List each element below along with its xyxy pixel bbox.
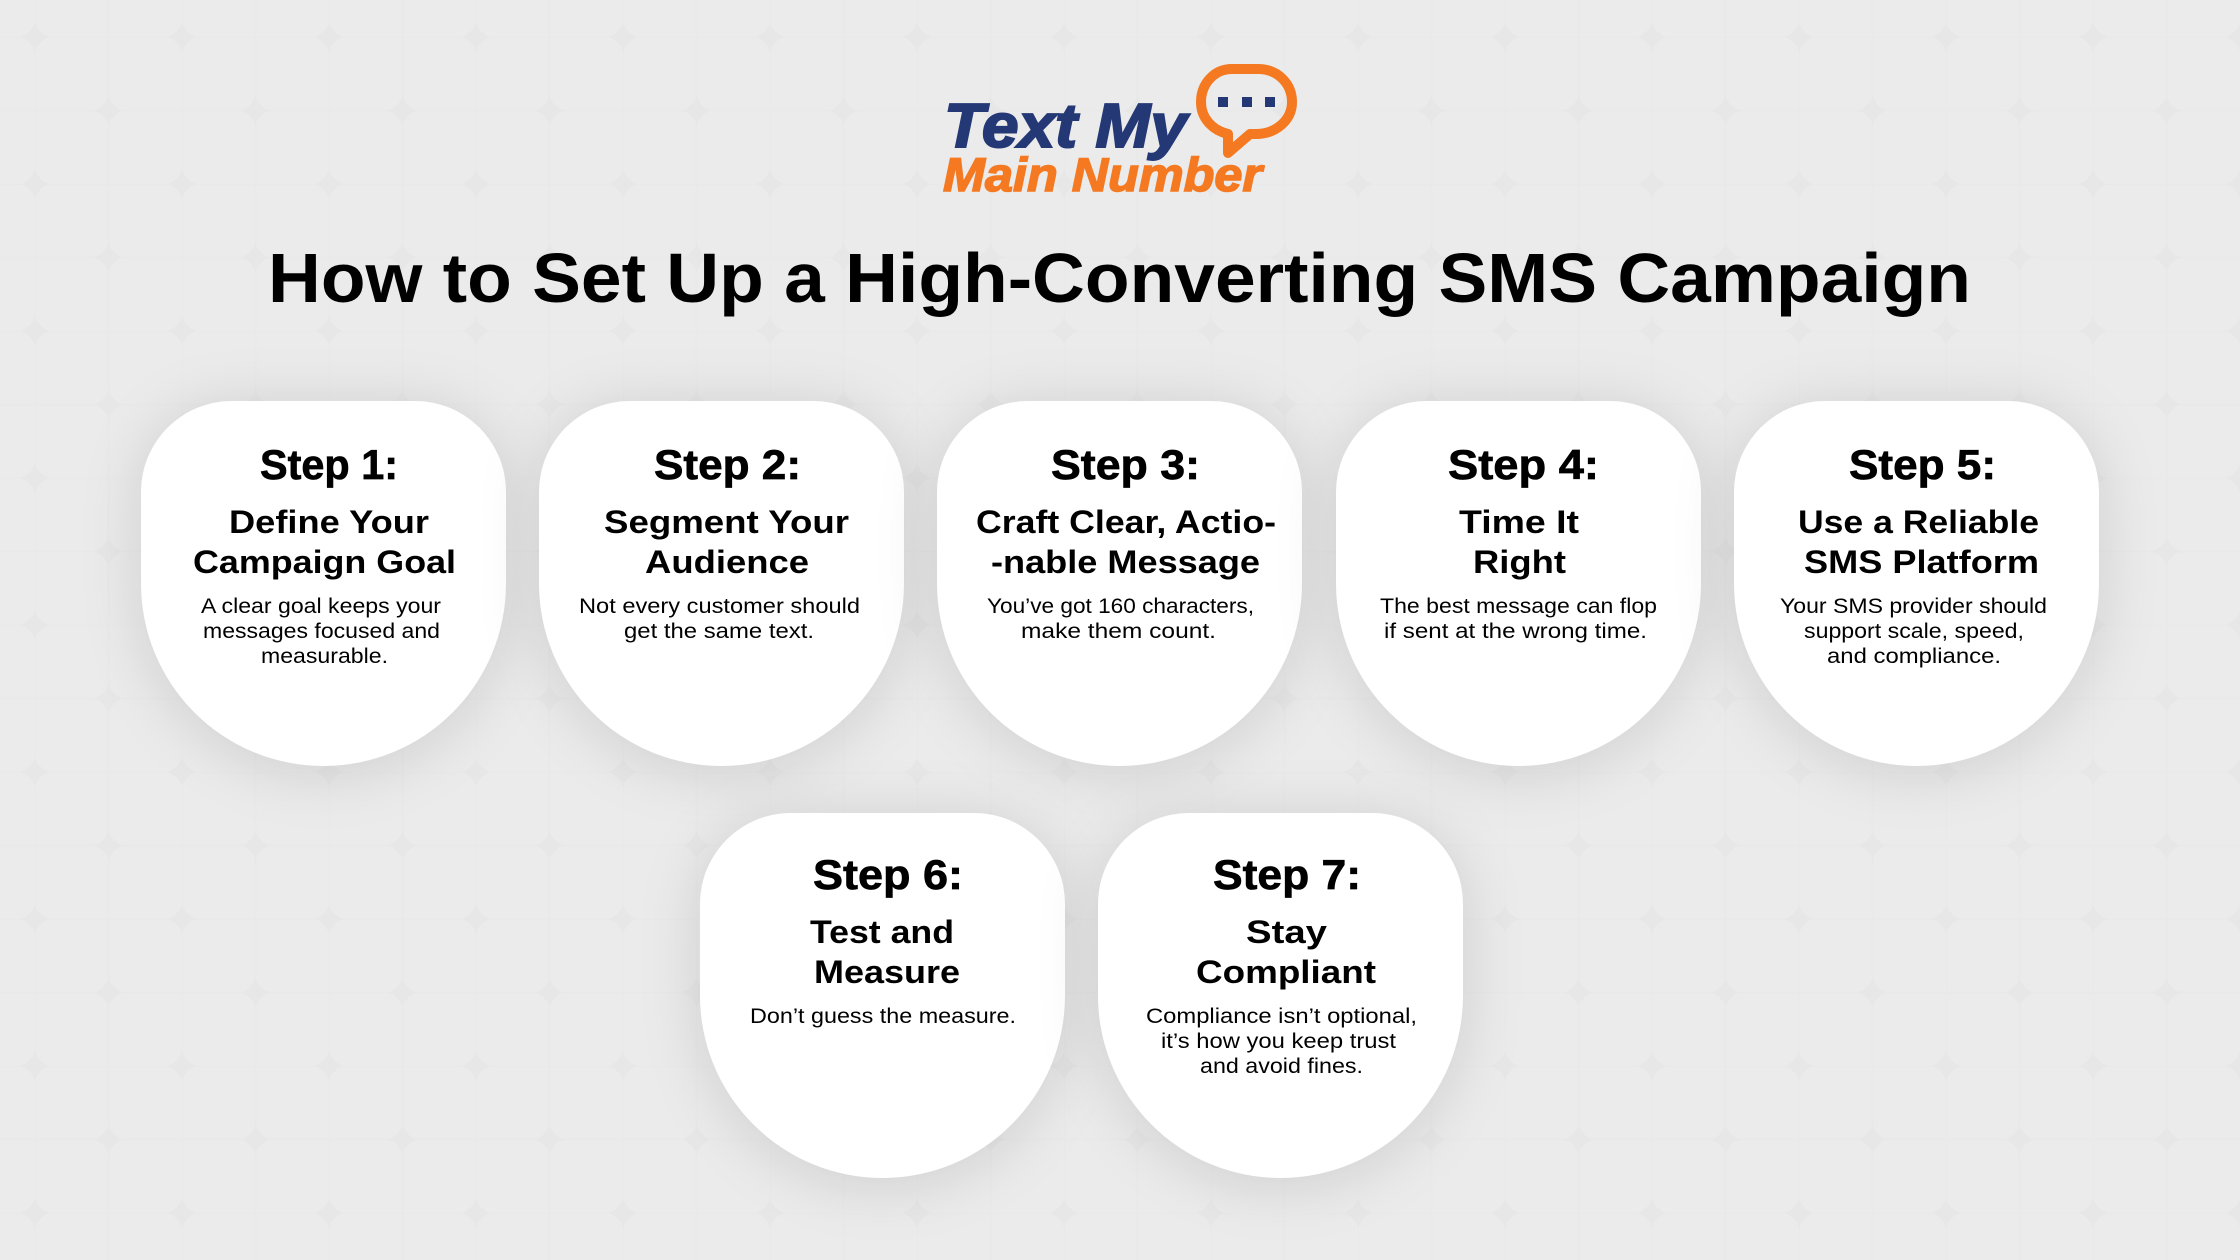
step 1 description: measurable. [261,644,388,668]
panel: step 2 [539,401,904,766]
logo wordmark: Main Number: Main Number [943,148,1265,201]
step 4 subtitle: Right [1473,544,1566,580]
step 4 description: The best message can flop [1380,594,1657,618]
panel: step 6 [700,813,1065,1178]
step 2 subtitle: Segment Your [604,504,849,540]
step 2 subtitle: Audience [645,544,809,580]
step 1 subtitle: Define Your [229,504,429,540]
panel: step 7 [1098,813,1463,1178]
panel: step 1 [141,401,506,766]
step 6 subtitle [810,914,960,990]
step 5 description: and compliance. [1827,644,2001,668]
step 7 description: Compliance isn’t optional, [1146,1004,1417,1028]
step 3 description: You’ve got 160 characters, [987,594,1254,618]
step 7 description [1146,1004,1417,1078]
step 3 subtitle: -nable Message [991,544,1260,580]
step 7 description: it’s how you keep trust [1161,1029,1396,1053]
panel: step 4 [1336,401,1701,766]
step 2 description: get the same text. [624,619,814,643]
step 2 description [579,594,860,643]
icon: speech bubble [1201,69,1292,153]
step 1 subtitle [193,504,456,580]
step 5 description [1780,594,2047,668]
step 5 description: support scale, speed, [1804,619,2024,643]
step 5 subtitle: Use a Reliable [1798,504,2039,540]
step 6 heading: Step 6: [813,851,963,898]
step 5 heading: Step 5: [1849,441,1996,488]
step 4 subtitle [1459,504,1579,580]
logo: Text My Main Number [943,69,1292,201]
panel: step 3 [937,401,1302,766]
panel: step 5 [1734,401,2099,766]
step 1 description: A clear goal keeps your [201,594,441,618]
step 3 subtitle [976,504,1276,580]
step 4 heading: Step 4: [1448,441,1599,488]
step 7 description: and avoid fines. [1200,1054,1363,1078]
step 5 description: Your SMS provider should [1780,594,2047,618]
step 6 description: Don’t guess the measure. [750,1004,1016,1028]
step 5 subtitle: SMS Platform [1804,544,2039,580]
logo wordmark: Text My: Text My [944,92,1191,161]
step 3 description [987,594,1254,643]
step 1 subtitle: Campaign Goal [193,544,456,580]
step 6 subtitle: Test and [810,914,954,950]
step 6 subtitle: Measure [814,954,960,990]
step 1 heading: Step 1: [260,441,398,488]
step 3 heading: Step 3: [1051,441,1200,488]
step 2 heading: Step 2: [654,441,801,488]
step 4 description [1380,594,1657,643]
step 1 description [201,594,441,668]
step 7 subtitle: Stay [1246,914,1327,950]
step 3 subtitle: Craft Clear, Actio- [976,504,1276,540]
step 4 description: if sent at the wrong time. [1384,619,1647,643]
step 2 subtitle [604,504,849,580]
step 1 description: messages focused and [203,619,440,643]
step 2 description: Not every customer should [579,594,860,618]
step 3 description: make them count. [1021,619,1216,643]
step 7 subtitle: Compliant [1196,954,1376,990]
title: How to Set Up a High-Converting SMS Campaign [268,239,1971,317]
step 7 subtitle [1196,914,1376,990]
step 4 subtitle: Time It [1459,504,1579,540]
step 5 subtitle [1798,504,2039,580]
step 7 heading: Step 7: [1213,851,1361,898]
